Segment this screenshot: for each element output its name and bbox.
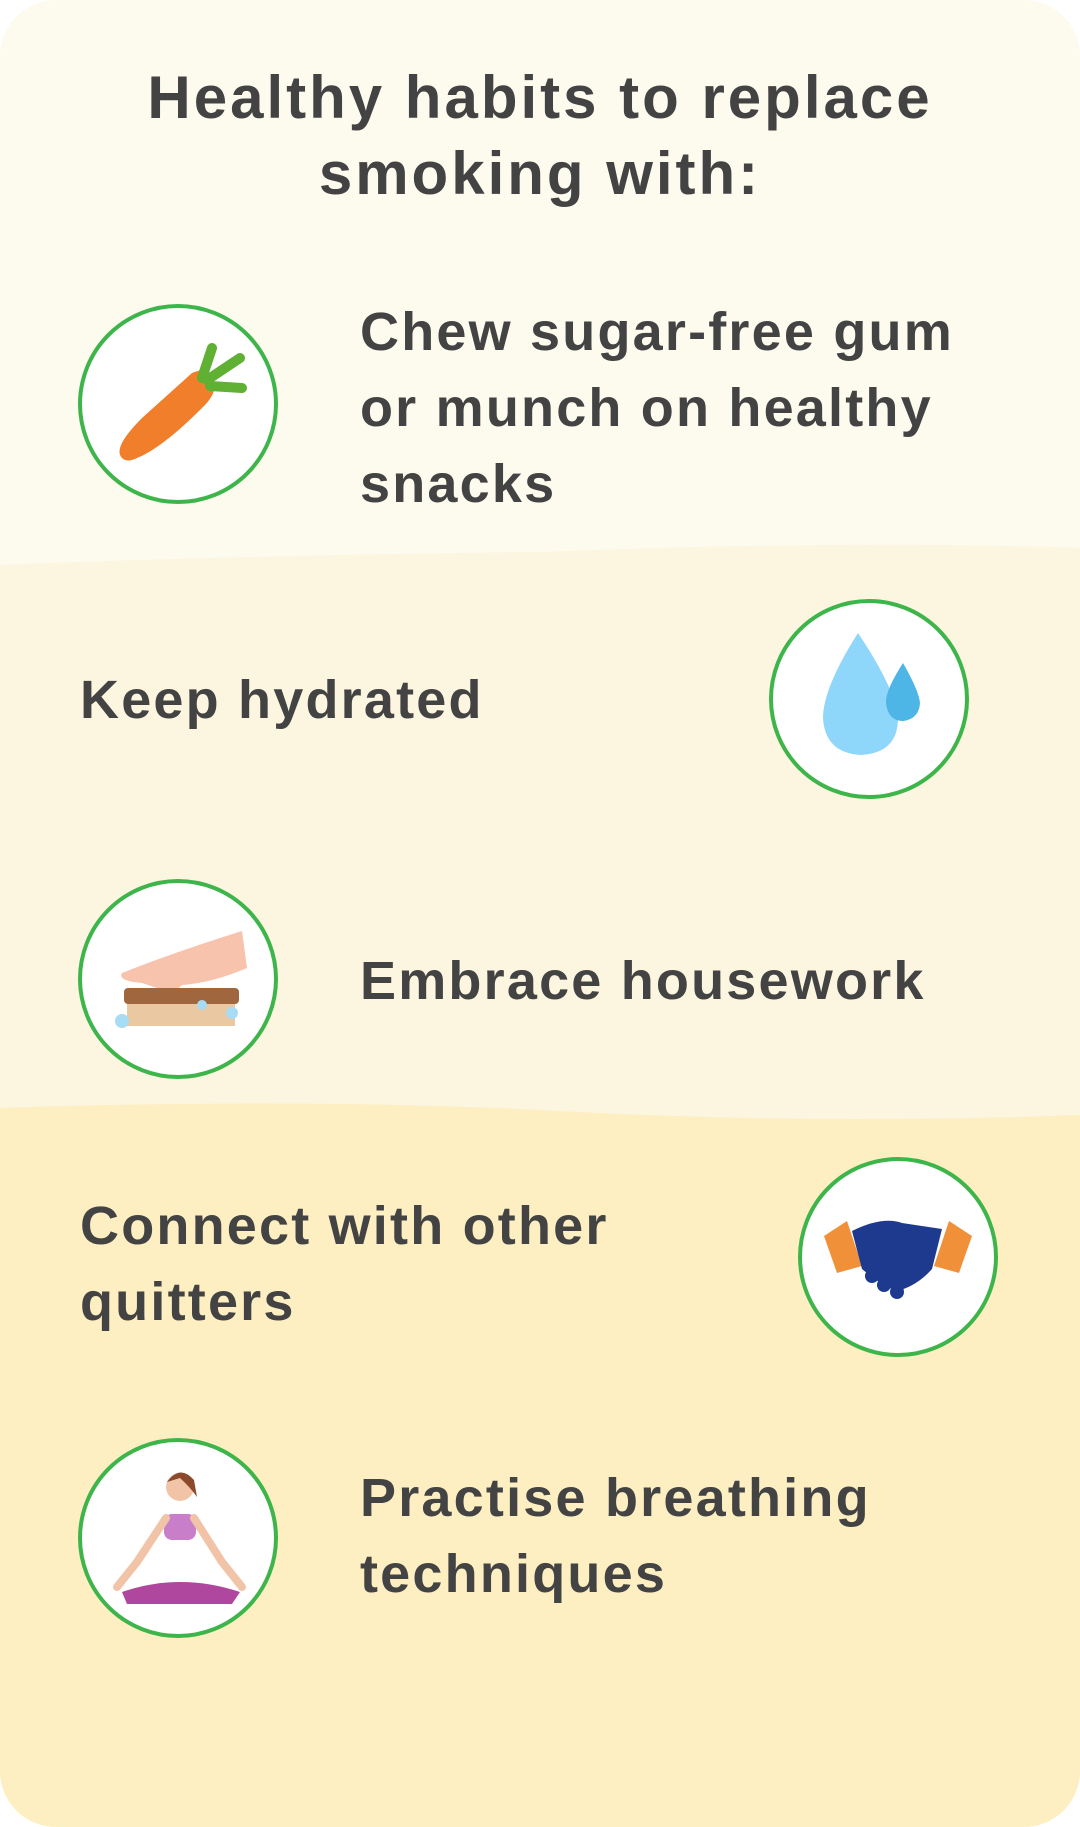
text: breathing: Practise breathing bbox=[360, 1468, 871, 1528]
icon: yoga bbox=[78, 1438, 278, 1638]
icon: water drops bbox=[769, 599, 969, 799]
icon: housework bbox=[78, 879, 278, 1079]
title: Healthy habits to replace bbox=[147, 64, 933, 131]
text: chew gum: Chew sugar-free gum bbox=[360, 302, 954, 362]
text: connect: Connect with other bbox=[80, 1196, 609, 1256]
text: hydrated: Keep hydrated bbox=[80, 670, 484, 730]
text: housework: Embrace housework bbox=[360, 951, 926, 1011]
text: connect bbox=[80, 1196, 609, 1332]
text: chew gum bbox=[360, 302, 954, 514]
title bbox=[147, 64, 933, 207]
text: breathing bbox=[360, 1468, 871, 1604]
text: breathing: techniques bbox=[360, 1544, 667, 1604]
text: chew gum: or munch on healthy bbox=[360, 378, 933, 438]
text: chew gum: snacks bbox=[360, 454, 556, 514]
icon: carrot bbox=[78, 304, 278, 504]
text: connect: quitters bbox=[80, 1272, 296, 1332]
icon: handshake bbox=[798, 1157, 998, 1357]
title: smoking with: bbox=[319, 140, 761, 207]
